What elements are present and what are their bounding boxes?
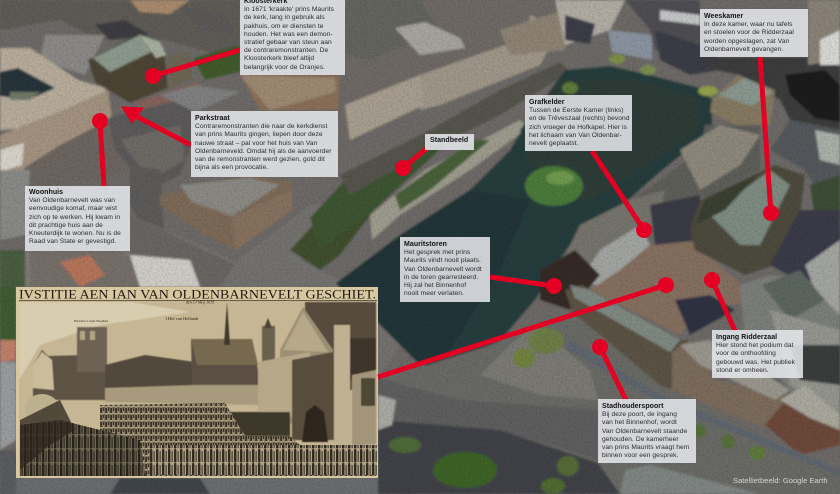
arrow: Parkstraat	[122, 107, 191, 145]
south trees	[433, 452, 497, 488]
text box: Mauritstoren: Van Oldenbarnevelt wordt	[404, 266, 482, 273]
text box: Kloosterkerk: In 1671 'kraakte' prins Maurits	[244, 6, 334, 13]
square & road south	[380, 310, 840, 494]
leader: engraving to square	[378, 280, 672, 377]
text box: Standbeeld	[425, 134, 474, 150]
text box: Woonhuis: Van Oldenbarnevelt was van	[29, 197, 115, 204]
leader: Ingang Ridderzaal	[706, 274, 735, 331]
water	[336, 66, 712, 378]
text box: Ingang Ridderzaal: Ingang Ridderzaal	[716, 334, 777, 341]
text box: Mauritstoren: nooit meer verlaten.	[404, 290, 464, 297]
credit: Satellietbeeld: Google Earth	[733, 476, 828, 485]
text box: Woonhuis: Kneuterdijk te wonen. Nu is de	[29, 230, 121, 237]
text box: Kloosterkerk: stratief gebaar van steun aan	[244, 39, 332, 46]
text box: Grafkelder: het lichaam van Van Oldenbar-	[529, 132, 622, 139]
text box: Parkstraat: nauwe straat – pal voor het huis van Van	[195, 140, 317, 147]
text box: Weeskamer: en stoelen voor de Ridderzaal	[704, 29, 794, 36]
right hall	[280, 307, 333, 440]
text box: Parkstraat: Contraremonstranten die naar de kerkdienst	[195, 123, 327, 130]
leader: Grafkelder	[592, 151, 650, 236]
leader: Mauritstoren	[490, 277, 560, 292]
leader: Woonhuis	[94, 116, 106, 187]
text box: Kloosterkerk	[240, 0, 345, 75]
text box: Parkstraat	[191, 111, 338, 177]
text box: Kloosterkerk: houden. Het was een demon-	[244, 31, 333, 38]
text box: Stadhouderspoort: Van Oldenbarnevelt staande	[602, 428, 687, 435]
text box: Grafkelder: Tussen de Eerste Kamer (links)	[529, 107, 624, 114]
engraving title: Hofstad in 's Graaf. Hooghden	[74, 320, 109, 323]
engraving title: IVSTITIE AEN IAN VAN OLDENBARNEVELT GESCHIET.	[19, 287, 376, 302]
text box: Grafkelder: Grafkelder	[529, 99, 565, 106]
text box: Stadhouderspoort: Stadhouderspoort	[602, 403, 663, 410]
text box: Weeskamer: Oldenbarnevelt gevangen.	[704, 46, 783, 53]
text box: Stadhouderspoort: van prins Maurits vraagt hem	[602, 444, 689, 451]
tree tufts on north bank	[609, 54, 625, 64]
Kloosterkerk	[88, 33, 168, 103]
text box: Parkstraat: Oldenbarneveld. Omdat hij als de aanvoerder	[195, 148, 332, 155]
engraving title: 't Hof van Hollandt	[165, 316, 199, 321]
text box: Woonhuis	[25, 186, 130, 251]
text box: Weeskamer	[700, 9, 808, 57]
text box: Ingang Ridderzaal	[712, 330, 803, 378]
text box: Standbeeld: Standbeeld	[430, 137, 468, 144]
leader: Stadhouderspoort	[594, 342, 626, 400]
platform	[225, 412, 290, 436]
east complex	[740, 275, 840, 420]
left wing	[33, 328, 107, 400]
text box: Parkstraat: bijna als een provocatie.	[195, 164, 268, 171]
hall	[191, 339, 258, 385]
text box: Stadhouderspoort: Bij deze poort, de ingang	[602, 411, 677, 418]
leader: Kloosterkerk	[148, 50, 240, 82]
text box: Ingang Ridderzaal: Hier stond het podium dat	[716, 342, 794, 349]
text box: Stadhouderspoort	[598, 399, 696, 463]
text box: Weeskamer: Weeskamer	[704, 13, 743, 20]
crowd	[100, 403, 376, 476]
text box: Weeskamer: In deze kamer, waar nu tafels	[704, 21, 792, 28]
top left quarter	[0, 0, 240, 60]
text box: Ingang Ridderzaal: gebouwd was. Het publiek	[716, 359, 795, 366]
text box: Kloosterkerk: belangrijk voor de Oranjes.	[244, 64, 325, 71]
text box: Parkstraat: van de remonstranten werd gezien, gold dit	[195, 156, 325, 163]
text box: Ingang Ridderzaal: voor de onthoofding	[716, 350, 776, 357]
south buildings	[620, 465, 760, 494]
Ridderzaal	[690, 165, 805, 275]
text box: Stadhouderspoort: binnen voor een gesprek.	[602, 452, 678, 459]
Binnenhof square	[590, 240, 760, 335]
text box: Mauritstoren: Maurits vindt nooit plaats.	[404, 257, 481, 264]
text box: Kloosterkerk: de contraremonstranten. De	[244, 47, 328, 54]
island	[525, 166, 583, 206]
text box: Woonhuis: dit prachtige huis aan de	[29, 222, 103, 229]
text box: Kloosterkerk: Kloosterkerk bleef altijd	[244, 55, 314, 62]
text box: Parkstraat: van prins Maurits gingen, liepen door deze	[195, 131, 323, 138]
text box: Stadhouderspoort: gehouden. De kamerheer	[602, 436, 679, 443]
text box: Weeskamer: worden opgeslagen, zat Van	[704, 38, 789, 45]
top centre buildings	[240, 75, 340, 110]
text box: Stadhouderspoort: van het Binnenhof, wordt	[602, 419, 677, 426]
long Hofvijver wing	[565, 285, 700, 395]
engraving title	[17, 287, 377, 323]
text box: Kloosterkerk: de kerk, lang in gebruik als	[244, 14, 325, 21]
text box: Mauritstoren: Hij zal het Binnenhof	[404, 282, 466, 289]
text box: Grafkelder	[525, 95, 632, 151]
text box: Mauritstoren: Mauritstoren	[404, 241, 447, 248]
text box: Woonhuis: Woonhuis	[29, 189, 63, 196]
text box: Woonhuis: Raad van State er gevestigd.	[29, 238, 116, 245]
road left of pond	[130, 200, 400, 378]
leader: Standbeeld	[398, 149, 426, 174]
engraving title: den 13 Meij 1619	[186, 300, 214, 304]
leader: Weeskamer	[760, 57, 776, 218]
text box: Woonhuis: zich op te werken. Hij kwam in	[29, 214, 120, 221]
text box: Parkstraat: Parkstraat	[195, 115, 230, 122]
text box: Woonhuis: eenvoudige komaf, maar wist	[29, 205, 117, 212]
text box: Grafkelder: zich vroeger de Hofkapel. Hier is	[529, 124, 627, 131]
Eerste Kamer & north Binnenhof	[710, 75, 775, 125]
text box: Mauritstoren	[400, 237, 490, 302]
text box: Grafkelder: en de Trêveszaal (rechts) bevond	[529, 115, 629, 122]
text box: Grafkelder: nevelt geplaatst.	[529, 140, 578, 147]
mid left blocks	[108, 100, 195, 190]
Rijksgebouw	[160, 175, 292, 250]
text box: Mauritstoren: in de toren gearresteerd.	[404, 274, 478, 281]
text box: Kloosterkerk: pakhuis, om er diensten te	[244, 23, 323, 30]
text box: Ingang Ridderzaal: stond er omheen.	[716, 367, 769, 374]
text box: Mauritstoren: Het gesprek met prins	[404, 249, 470, 256]
